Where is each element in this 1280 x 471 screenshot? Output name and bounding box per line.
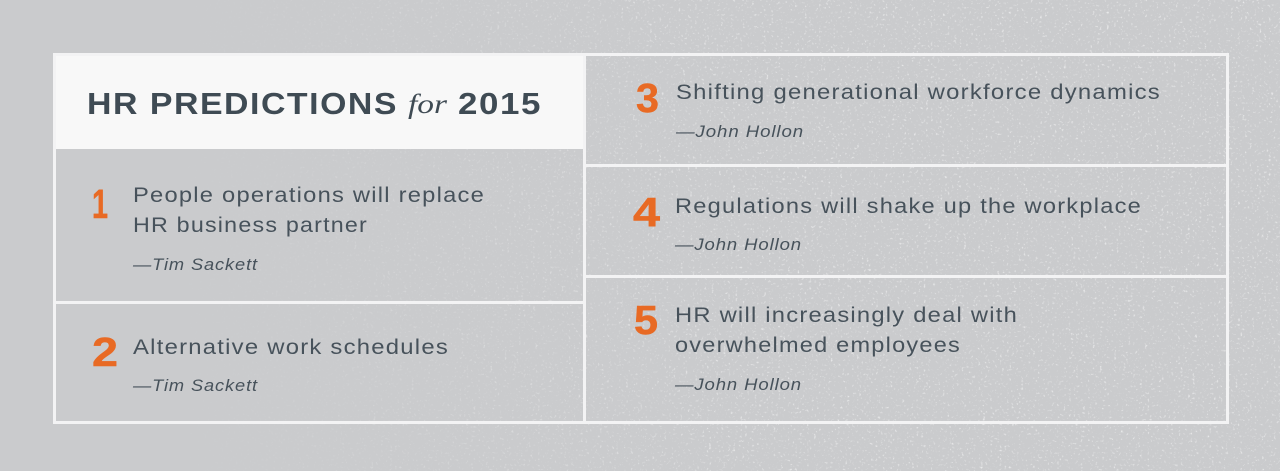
prediction 1 <box>92 181 485 274</box>
heading: HR Predictions for 2015: for <box>408 89 448 119</box>
panel: title header <box>53 53 586 149</box>
prediction 4: —John Hollon <box>674 236 802 254</box>
prediction 5: —John Hollon <box>674 376 802 394</box>
prediction 4: 4 <box>633 189 660 235</box>
prediction 5: overwhelmed employees <box>675 334 961 357</box>
table frame lines <box>53 53 1229 424</box>
prediction 1: People operations will replace <box>133 184 485 207</box>
prediction 1: —Tim Sackett <box>132 256 259 274</box>
prediction 3 <box>636 75 1161 141</box>
heading: HR Predictions for 2015: 2015 <box>458 86 542 121</box>
prediction 2: Alternative work schedules <box>133 336 449 359</box>
prediction 2: —Tim Sackett <box>132 377 259 395</box>
heading: HR Predictions for 2015 <box>87 86 542 121</box>
prediction 3: 3 <box>636 75 659 121</box>
prediction 4: Regulations will shake up the workplace <box>675 195 1142 218</box>
prediction 1: HR business partner <box>133 214 368 237</box>
prediction 3: —John Hollon <box>675 123 804 141</box>
prediction 4 <box>633 189 1142 254</box>
prediction 5 <box>634 297 1018 394</box>
prediction 2 <box>92 329 449 395</box>
prediction 5: 5 <box>634 297 658 343</box>
prediction 1: 1 <box>92 181 108 227</box>
prediction 2: 2 <box>92 329 118 375</box>
heading: HR Predictions for 2015: HR PREDICTIONS <box>87 86 398 121</box>
prediction 3: Shifting generational workforce dynamics <box>676 81 1161 104</box>
prediction 5: HR will increasingly deal with <box>675 304 1018 327</box>
